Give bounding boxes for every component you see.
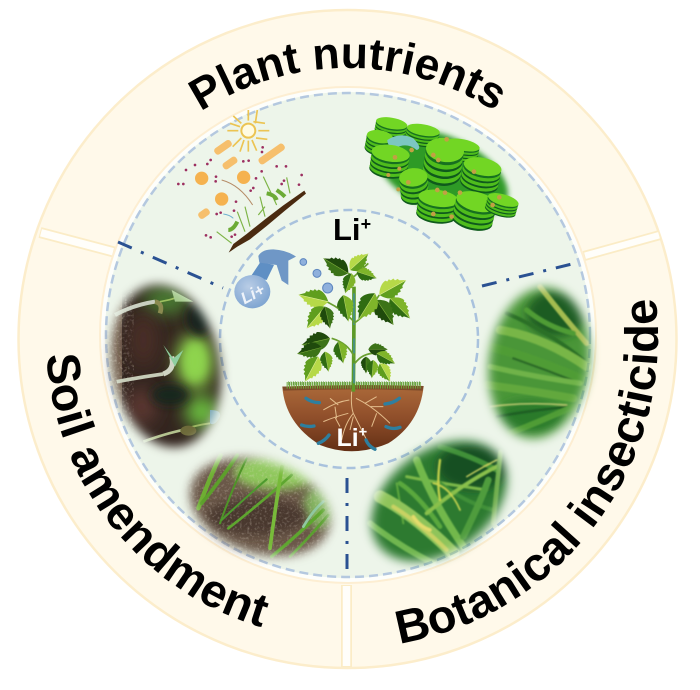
label: Li+ top: + (361, 214, 371, 234)
heading: Soil amendment: Soil amendment (47, 355, 269, 627)
seedlings (217, 177, 290, 243)
ring separator: right (584, 235, 660, 256)
soil strip (229, 191, 306, 253)
heading: Plant nutrients: Plant nutrients (188, 40, 503, 110)
illustration: photosynthesis diagram (177, 110, 306, 253)
illustration: plant with roots in soil (282, 248, 424, 452)
stem (348, 287, 359, 392)
icon: spray bottle (234, 249, 333, 308)
leaves (319, 251, 353, 281)
icon: sun (227, 110, 269, 152)
green glow (362, 110, 521, 236)
nutrient circles (195, 171, 250, 206)
label: Li+ in soil: Li (337, 425, 359, 452)
label: Li+ in soil: + (359, 425, 367, 441)
ring separator: bottom (341, 585, 352, 667)
label: Li+ top: Li (333, 212, 361, 247)
spray head (258, 249, 296, 285)
grass (287, 375, 422, 395)
heading: Botanical insecticide: Botanical insecticide (395, 300, 658, 644)
bottle neck (251, 262, 274, 280)
image: insect-damaged leaves, right (480, 280, 598, 446)
image: wheat sprouts in soil (182, 450, 338, 564)
lithium ion arcs (302, 398, 400, 449)
molecules (177, 146, 303, 239)
droplets (300, 259, 333, 293)
roots (323, 392, 390, 443)
image: leaves with disease spots, bottom right (363, 432, 514, 570)
dash-dot divider: left (118, 242, 223, 288)
image: chloroplast thylakoid stacks (362, 110, 521, 236)
nutrient pills (197, 139, 286, 220)
bottle body (234, 275, 270, 308)
dash-dot divider: right (482, 263, 576, 286)
inner dashed circle (220, 210, 478, 468)
dash-dot divider: bottom (346, 478, 348, 574)
ring separator: left (40, 232, 114, 252)
thylakoid lumen (387, 135, 419, 150)
bottle label: Li+ (237, 280, 268, 308)
image: seedlings in soil (103, 276, 230, 456)
soil hemisphere (282, 385, 424, 451)
middle disc (99, 86, 597, 584)
